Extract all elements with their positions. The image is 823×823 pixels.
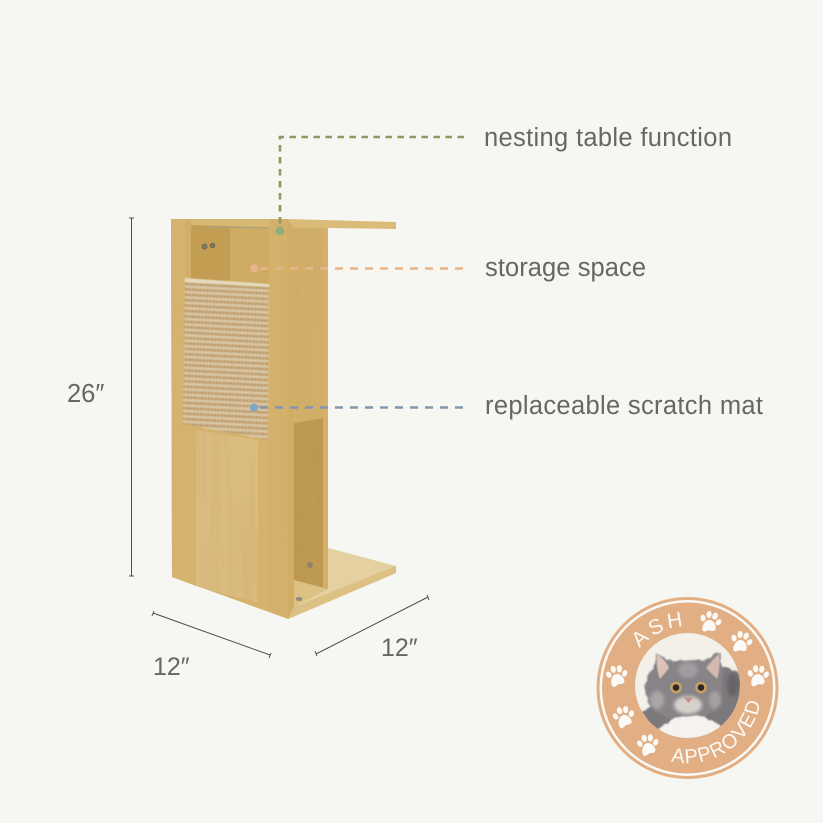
left strip of face [171, 219, 196, 586]
green dot [276, 226, 284, 236]
product: wooden cat scratcher table [171, 219, 396, 619]
right upright strip [323, 228, 328, 589]
screw bottom [296, 562, 313, 601]
left width line [152, 611, 271, 658]
right depth line [315, 595, 429, 656]
dimension: left width 12 inches [152, 611, 271, 681]
front left face [171, 219, 270, 612]
callout: storage space [250, 254, 646, 282]
badge text APPROVED: APPROVED [670, 701, 760, 764]
right depth label: 12″ [381, 634, 418, 662]
callout: replaceable scratch mat [250, 392, 763, 420]
height label: 26″ [67, 380, 104, 408]
wall bolts [202, 243, 215, 249]
floor visible through opening [293, 580, 328, 607]
label: nesting table function [484, 124, 732, 152]
badge text ASH: ASH [634, 612, 682, 648]
vertical front seam strip [258, 440, 270, 612]
label: storage space [485, 254, 646, 282]
cat head [645, 652, 722, 722]
right side panel upper [294, 228, 323, 423]
cat body [642, 668, 742, 745]
ears inner [657, 654, 669, 679]
dimension: right depth 12 inches [315, 595, 429, 662]
left post [185, 219, 191, 282]
muzzle highlight [674, 696, 702, 714]
paw prints [604, 608, 771, 757]
nose [684, 698, 693, 703]
badge tan disc [602, 602, 773, 774]
table top [287, 219, 396, 229]
rear opening panel [293, 418, 324, 588]
lighter face centre [196, 430, 258, 603]
eyes [670, 682, 707, 693]
badge: Ash approved [596, 597, 778, 779]
leader line green [280, 137, 464, 226]
fur mottling [650, 662, 739, 709]
floor base [288, 548, 396, 619]
label: replaceable scratch mat [485, 392, 763, 420]
sisal scratch mat [183, 278, 269, 440]
front column [269, 219, 288, 619]
cavity above mat [185, 219, 269, 288]
cat photo [635, 633, 740, 738]
badge white ring [600, 600, 776, 776]
blue dot [250, 404, 258, 412]
white chest [658, 714, 721, 738]
left width label: 12″ [153, 653, 190, 681]
dimension: height 26 inches [67, 218, 134, 576]
leader line blue [260, 406, 464, 409]
callout: nesting table function [276, 124, 732, 236]
leader line orange [260, 267, 464, 270]
badge outer ring [596, 597, 778, 779]
orange dot [250, 264, 258, 272]
height line [129, 218, 134, 576]
